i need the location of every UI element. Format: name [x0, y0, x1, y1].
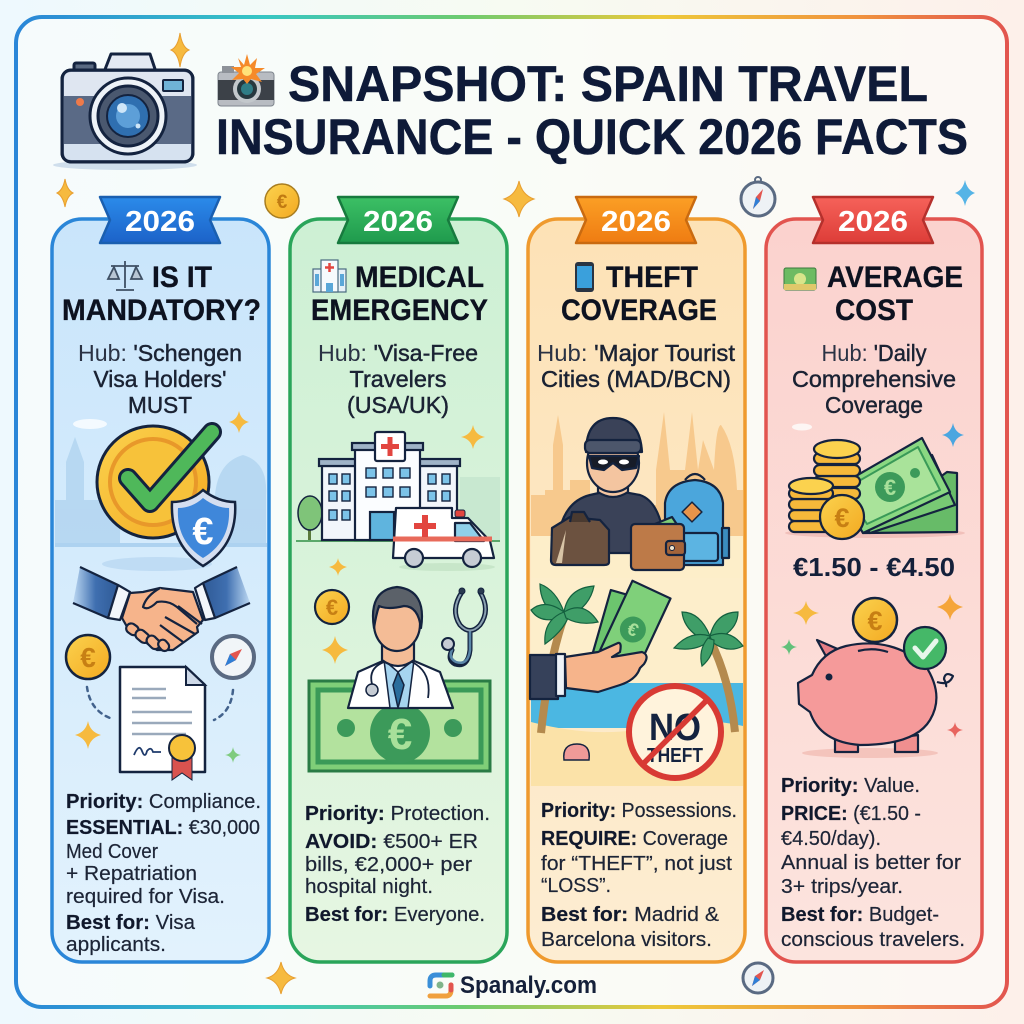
- body text: “LOSS”.: [541, 874, 611, 897]
- icon: ambulance: [393, 508, 495, 571]
- icon: coin top: €: [277, 192, 288, 213]
- body text: AVOID: €500+ ER: [305, 830, 478, 853]
- body text: Priority: Protection.: [305, 802, 490, 825]
- year badge: 2026: [838, 206, 908, 238]
- icon: large camera: [53, 54, 197, 170]
- price range: €1.50 - €4.50: [793, 552, 955, 582]
- body text: [541, 799, 737, 951]
- sparkles: [75, 411, 249, 763]
- year badge: 2026: [125, 206, 195, 238]
- body text: REQUIRE: Coverage: [541, 827, 728, 850]
- icon: coins and banknotes: [785, 438, 965, 539]
- heading: THEFT: [606, 261, 698, 294]
- hub text: MUST: [128, 392, 192, 418]
- title: INSURANCE - QUICK 2026 FACTS: [216, 109, 968, 165]
- hub text: [318, 340, 478, 418]
- icon: banknote: [309, 681, 490, 771]
- hub text: Hub: 'Schengen: [78, 340, 242, 366]
- skyline: [55, 437, 267, 547]
- body text: ESSENTIAL: €30,000: [66, 816, 260, 839]
- heading: EMERGENCY: [311, 294, 488, 327]
- title: SNAPSHOT: SPAIN TRAVEL: [288, 56, 928, 112]
- body text: + Repatriation: [66, 862, 197, 885]
- body text: for “THEFT”, not just: [541, 852, 732, 875]
- heading: MANDATORY?: [62, 294, 261, 327]
- sparkles: [322, 425, 485, 664]
- icon: backpack: [665, 474, 729, 565]
- body text: Priority: Compliance.: [66, 790, 261, 813]
- icon: coin: [315, 590, 349, 624]
- faded city block: [460, 477, 500, 540]
- year badge: [338, 197, 458, 243]
- icon: policy document: [120, 667, 205, 780]
- heading: COST: [835, 294, 913, 327]
- icon: thief: [557, 418, 665, 553]
- heading: COVERAGE: [561, 294, 717, 327]
- body text: hospital night.: [305, 875, 433, 898]
- body text: Priority: Possessions.: [541, 799, 737, 822]
- panel: medical emergency: [290, 197, 507, 962]
- cloud: [792, 424, 812, 430]
- icon: wallet: [631, 517, 685, 570]
- body text: Best for: Everyone.: [305, 903, 485, 926]
- icon: no theft sign: NO: [649, 707, 701, 749]
- hub text: Cities (MAD/BCN): [541, 366, 731, 392]
- icon: coin with checkmark: [97, 426, 212, 571]
- sand floor: [531, 536, 743, 578]
- title: [216, 56, 968, 165]
- panel: average cost: [766, 197, 982, 962]
- year badge: 2026: [601, 206, 671, 238]
- dashed arrows: [87, 687, 233, 720]
- icon: handshake: [73, 567, 250, 653]
- icon: doctor: [348, 587, 453, 708]
- heading: AVERAGE: [827, 261, 963, 294]
- icon: small flash camera emoji: [218, 54, 274, 106]
- heading: IS IT: [152, 261, 212, 294]
- year badge: [813, 197, 933, 243]
- heading: [62, 261, 261, 327]
- icon: euro shield: €: [192, 511, 214, 553]
- icon: coins and banknotes: €: [884, 475, 896, 500]
- hub text: Hub: 'Daily: [822, 340, 927, 366]
- body text: Annual is better for: [781, 851, 961, 874]
- icon: seashell: [564, 744, 589, 760]
- heading: MEDICAL: [355, 261, 484, 294]
- sparkles: [781, 423, 964, 738]
- body text: €4.50/day).: [781, 827, 881, 850]
- icon: stethoscope: [442, 588, 486, 665]
- icon: stolen bag: [551, 512, 609, 565]
- body text: Best for: Visa: [66, 911, 196, 934]
- year badge: [100, 197, 220, 243]
- icon: cash in hand: [530, 581, 671, 699]
- body text: PRICE: (€1.50 -: [781, 802, 921, 825]
- body text: Med Cover: [66, 840, 158, 863]
- body text: [781, 774, 965, 951]
- hub text: Visa Holders': [94, 366, 226, 392]
- panel: is it mandatory: [52, 197, 269, 962]
- hub text: [537, 340, 736, 392]
- icon: coin into piggy: €: [867, 606, 883, 636]
- icon: coin: €: [326, 595, 338, 620]
- body text: [305, 802, 490, 926]
- icon: piggy bank: [798, 640, 953, 758]
- beach scene: [531, 578, 743, 786]
- icon: hospital: [296, 432, 500, 541]
- body text: 3+ trips/year.: [781, 875, 903, 898]
- body text: Best for: Madrid &: [541, 903, 719, 926]
- icon: euro shield: [172, 490, 235, 566]
- hub text: Coverage: [825, 392, 923, 418]
- icon: no theft sign: [629, 686, 721, 778]
- heading: [311, 260, 488, 327]
- icon: no theft sign: THEFT: [647, 745, 703, 767]
- body text: Barcelona visitors.: [541, 928, 712, 951]
- hub text: Hub: 'Visa-Free: [318, 340, 478, 366]
- body text: bills, €2,000+ per: [305, 853, 472, 876]
- heading: [561, 261, 717, 327]
- cloud: [73, 419, 107, 429]
- icon: palm trees: [531, 584, 743, 733]
- icon: coin top: [265, 184, 299, 218]
- icon: compass top: [741, 177, 775, 216]
- body text: required for Visa.: [66, 885, 225, 908]
- body text: Best for: Budget-: [781, 903, 939, 926]
- hub text: Comprehensive: [792, 366, 956, 392]
- icon: compass bottom: [743, 963, 773, 993]
- icon: banknote: €: [388, 710, 412, 759]
- icon: coin: [66, 635, 110, 679]
- year badge: [576, 197, 696, 243]
- body text: conscious travelers.: [781, 928, 965, 951]
- body text: [66, 790, 261, 956]
- panel: theft coverage: [528, 197, 745, 962]
- icon: cash in hand: €: [624, 618, 642, 641]
- icon: compass: [212, 636, 254, 678]
- icon: coin: €: [80, 642, 96, 673]
- hub text: [792, 340, 956, 418]
- heading: [784, 261, 963, 327]
- hub text: [78, 340, 242, 418]
- hub text: Hub: 'Major Tourist: [537, 340, 736, 366]
- logo: Spanaly.com: [460, 972, 597, 999]
- hub text: Travelers: [350, 366, 446, 392]
- icon: tree: [298, 496, 322, 540]
- icon: coins and banknotes: €: [834, 503, 850, 533]
- year badge: 2026: [363, 206, 433, 238]
- orange skyline: [531, 412, 743, 537]
- icon: check badge: [904, 627, 946, 669]
- hub text: (USA/UK): [347, 392, 449, 418]
- body text: Priority: Value.: [781, 774, 920, 797]
- icon: coin into piggy: [853, 598, 897, 642]
- body text: applicants.: [66, 933, 166, 956]
